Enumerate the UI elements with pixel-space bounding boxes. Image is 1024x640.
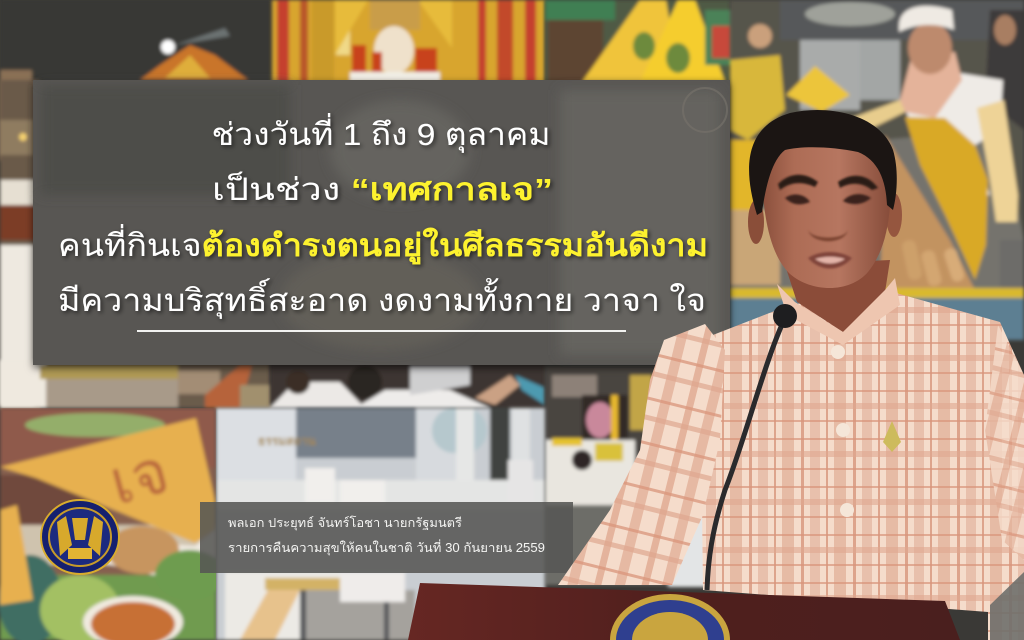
shirt body: [700, 290, 1024, 640]
main text panel: [33, 80, 730, 365]
face: [762, 135, 891, 288]
facial features: [778, 175, 878, 268]
podium: [408, 583, 960, 640]
hair: [749, 110, 897, 215]
speaker name: พลเอก ประยุทธ์ จันทร์โอชา นายกรัฐมนตรี: [228, 515, 462, 531]
nose: [808, 230, 848, 241]
left ear: [748, 200, 764, 244]
microphone: [707, 304, 797, 590]
programme and date: รายการคืนความสุขให้คนในชาติ วันที่ 30 กันยายน 2559: [228, 539, 545, 556]
photo: golden shrine: [272, 0, 545, 85]
photo: procession corner: [545, 365, 708, 587]
mouth: [808, 252, 852, 268]
photo: vegetarian food with yellow card: เจ: [103, 437, 176, 518]
line 2: festival name: เป็นช่วง “เทศกาลเจ”: [212, 171, 553, 207]
line 3: moral conduct: คนที่กินเจ ต้องดำรงตนอยู่ในศีลธรรมอันดีงาม: [58, 224, 708, 265]
line 1: dates: ช่วงวันที่ 1 ถึง 9 ตุลาคม: [212, 113, 550, 154]
photo: lower right strip: [990, 572, 1024, 640]
collar: [777, 278, 900, 345]
eyebrows: [778, 175, 878, 190]
photo: night temple: [0, 0, 272, 200]
left sleeve: [558, 324, 725, 585]
photo: white crowd at building: [216, 408, 545, 640]
icon: lapel badge: [883, 421, 901, 452]
buttons: [831, 345, 854, 517]
photo: white crowd at building: ธรรมสถาน: [258, 434, 316, 448]
photo: left strip: [0, 80, 40, 410]
photo: pot band: [0, 360, 272, 408]
icon: government seal: [41, 500, 119, 574]
right sleeve shade: [985, 325, 1024, 560]
photo: yellow flags: [545, 0, 737, 85]
line 4: purity: มีความบริสุทธิ์สะอาด งดงามทั้งกาย วาจา ใจ: [58, 277, 706, 320]
icon: podium seal: [610, 594, 730, 640]
photo: vegetarian food with yellow card: [0, 408, 225, 640]
photo: white-clad crowd: [270, 360, 545, 408]
panel heading text: [58, 113, 708, 320]
right ear: [886, 193, 902, 237]
eyes: [785, 194, 871, 204]
neck: [785, 260, 890, 332]
attribution caption bar: [200, 502, 573, 573]
photo: market vendor: [730, 0, 1024, 340]
presenter figure: [558, 110, 1024, 640]
